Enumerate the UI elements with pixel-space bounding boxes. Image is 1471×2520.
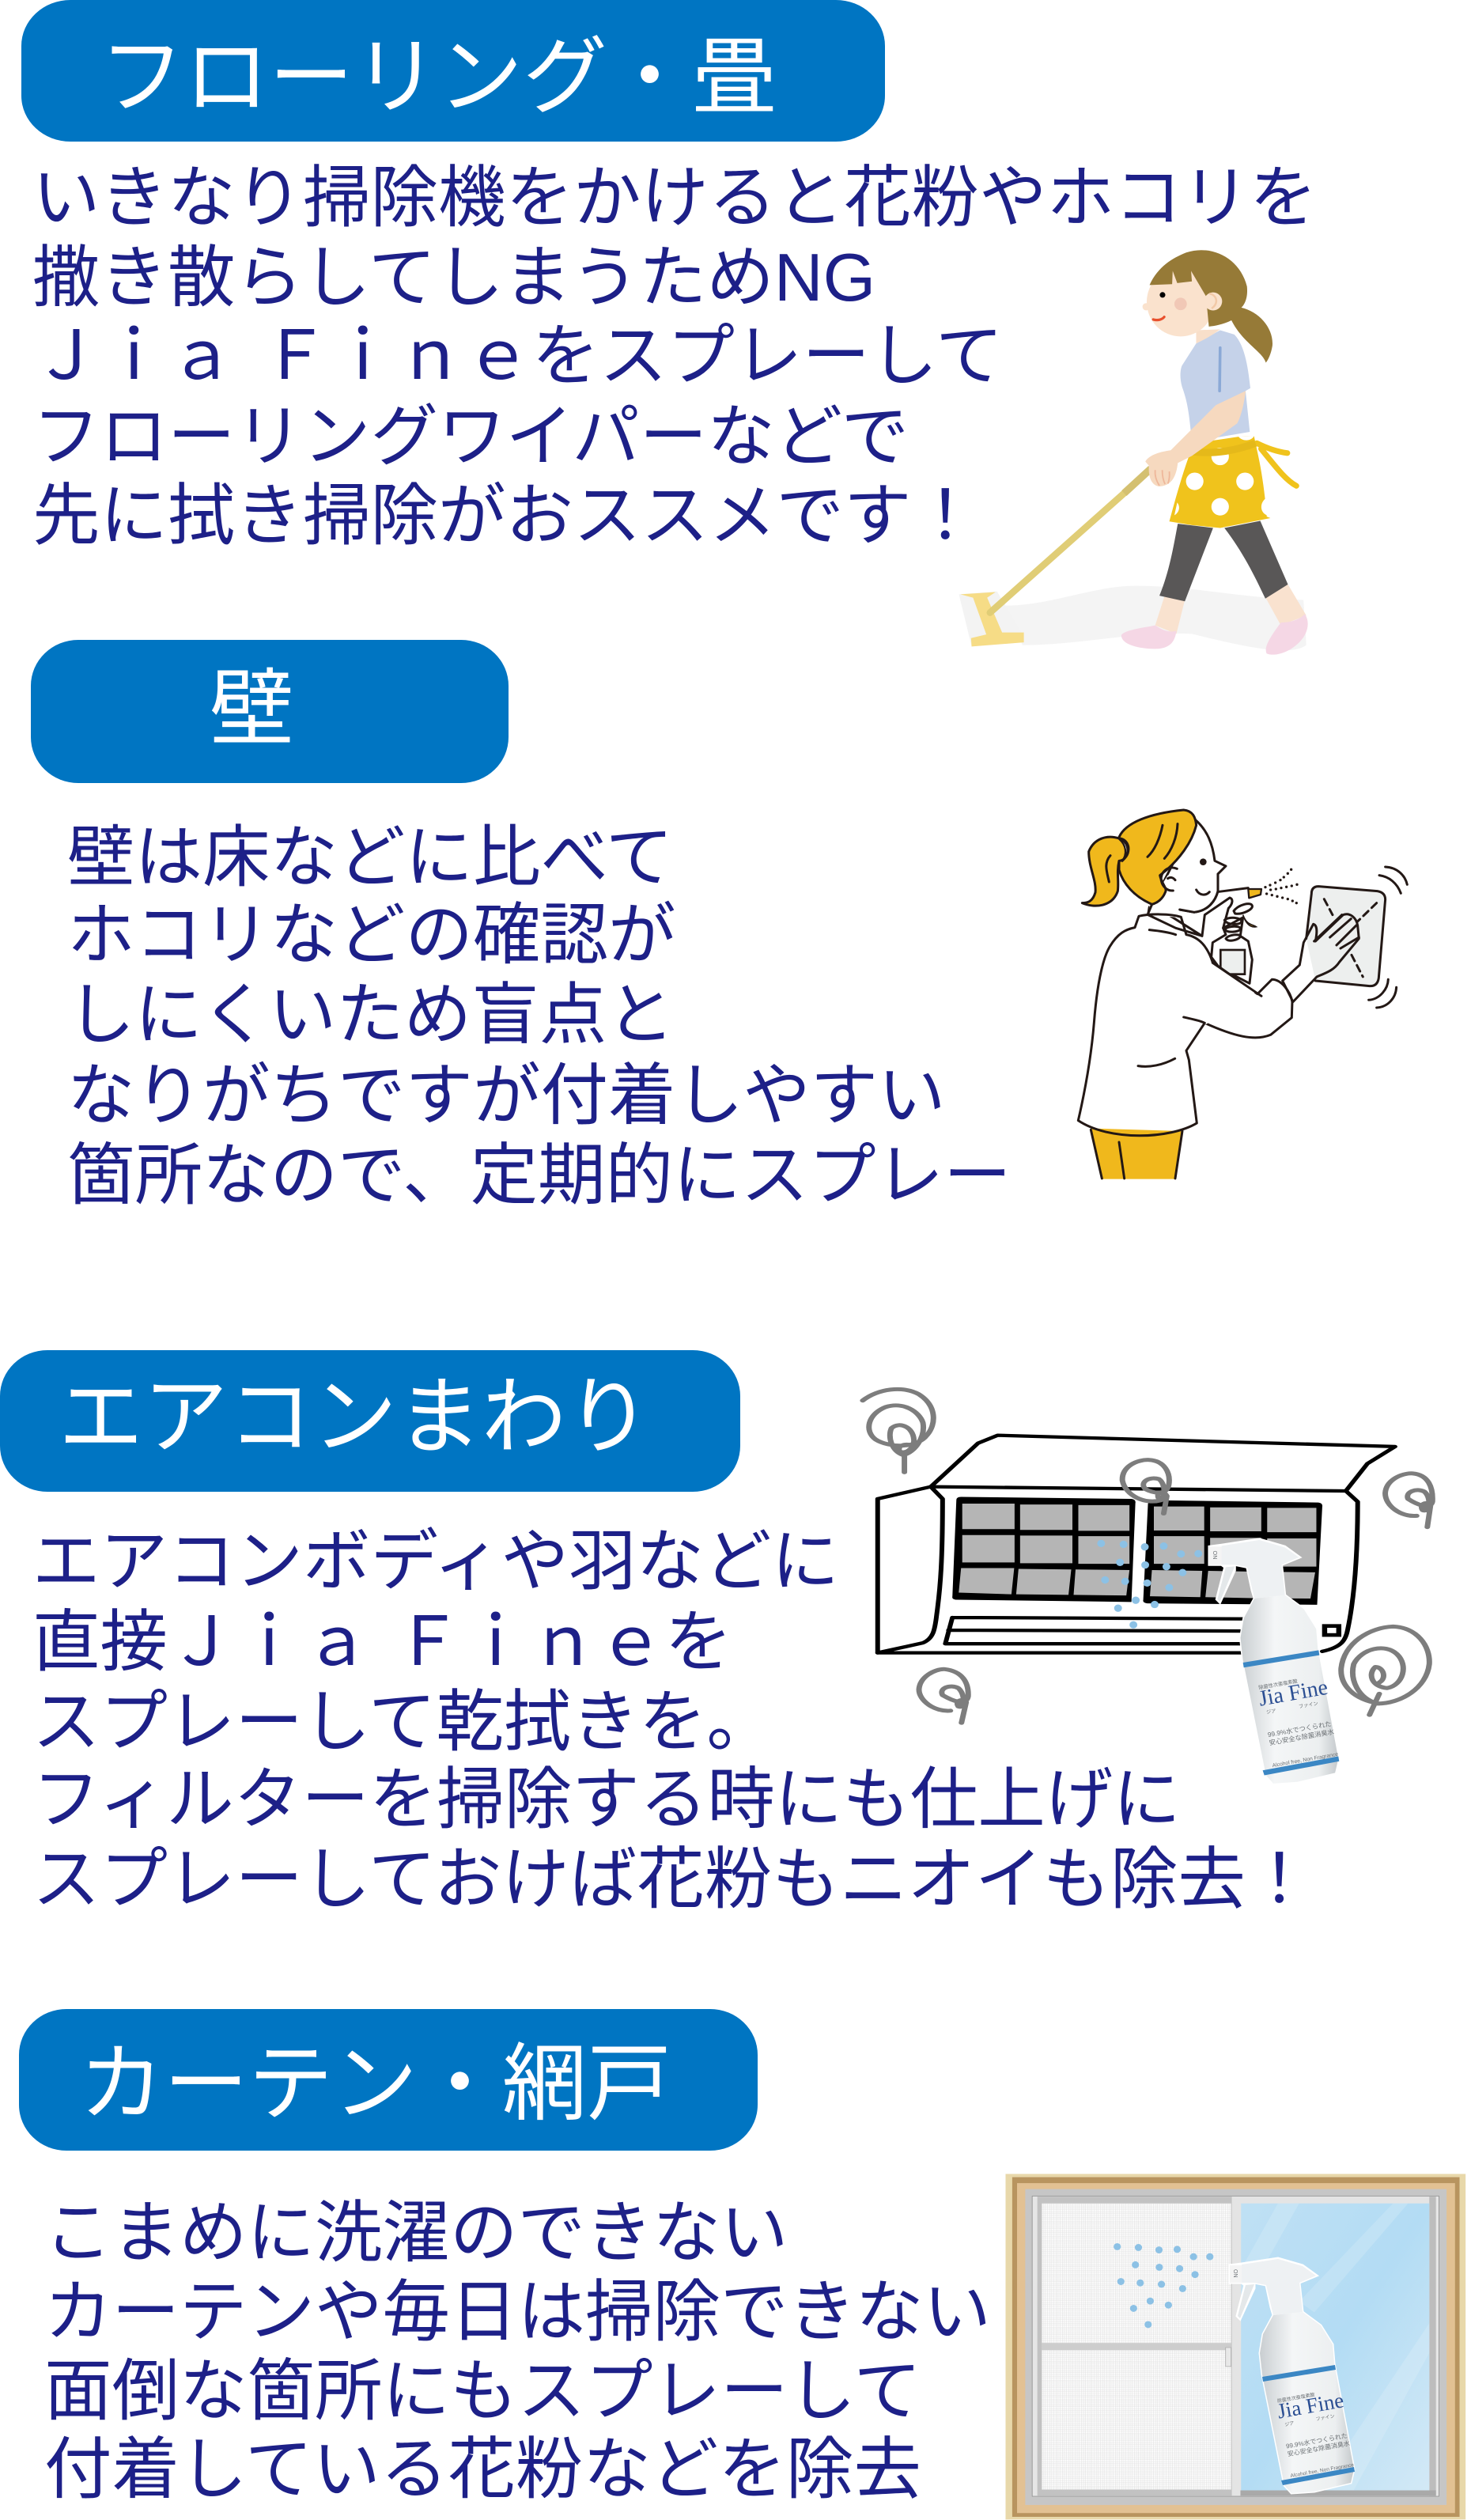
icon: Jia Fine spray bottle (window)	[1230, 2258, 1356, 2493]
text block: wall: 壁は床などに比べて	[67, 820, 673, 895]
illustration: air conditioner with pollen swirls	[863, 1389, 1432, 1723]
illustration: woman mopping the floor	[959, 250, 1308, 655]
text block: curtains and screens: 付着している花粉などを除去	[44, 2432, 921, 2507]
heading: カーテン・網戸	[19, 2009, 758, 2151]
icon: Jia Fine spray bottle (window): Jia Fine	[1276, 2388, 1345, 2424]
text block: flooring	[32, 161, 1318, 554]
icon: Jia Fine spray bottle (air conditioner)	[1209, 1539, 1340, 1784]
text block: curtains and screens	[44, 2196, 991, 2507]
illustration: woman spraying and wiping the wall	[1078, 810, 1407, 1179]
icon: Jia Fine spray bottle (window): 除菌性次亜塩素酸	[1276, 2391, 1315, 2405]
text block: air conditioner	[32, 1524, 1313, 1917]
text block: wall: なりがちですが付着しやすい	[67, 1058, 946, 1133]
text block: curtains and screens: カーテンや毎日は掃除できない	[44, 2275, 991, 2350]
icon: Jia Fine spray bottle (air conditioner): ジア	[1266, 1708, 1276, 1716]
text block: air conditioner: フィルターを掃除する時にも仕上げに	[32, 1762, 1181, 1837]
icon: Jia Fine spray bottle (air conditioner): 除菌性次亜塩素酸	[1258, 1678, 1299, 1691]
heading: エアコンまわり	[0, 1350, 740, 1492]
icon: Jia Fine spray bottle (window): ジア	[1284, 2420, 1295, 2427]
text block: wall: しにくいため盲点と	[67, 978, 675, 1053]
heading: エアコンまわり: エアコンまわり	[59, 1369, 651, 1464]
heading: フローリング・畳	[21, 0, 885, 142]
heading: 壁	[31, 640, 509, 783]
text block: curtains and screens: こまめに洗濯のできない	[44, 2196, 788, 2271]
icon: Jia Fine spray bottle (air conditioner): Jia Fine	[1257, 1675, 1329, 1712]
heading: 壁: 壁	[210, 661, 294, 756]
icon: pollen swirls	[863, 1389, 1432, 1723]
icon: Jia Fine spray bottle (window): ON	[1232, 2269, 1238, 2278]
text block: curtains and screens: 面倒な箇所にもスプレーして	[44, 2354, 921, 2429]
icon: Jia Fine spray bottle (air conditioner): 安心安全な除菌消臭水	[1269, 1727, 1335, 1746]
text block: air conditioner: スプレーしておけば花粉もニオイも除去！	[32, 1842, 1313, 1917]
icon: Jia Fine spray bottle (air conditioner): 99.9%水でつくられた	[1267, 1720, 1332, 1739]
icon: Jia Fine spray bottle (window): 99.9%水でつくられた	[1285, 2431, 1348, 2450]
text block: air conditioner: スプレーして乾拭きを。	[32, 1685, 774, 1760]
heading: カーテン・網戸: カーテン・網戸	[79, 2036, 671, 2131]
text block: flooring: 先に拭き掃除がおススメです！	[32, 479, 979, 554]
icon: Jia Fine spray bottle (air conditioner): ON	[1212, 1551, 1219, 1559]
icon: Jia Fine spray bottle (window): Alcohol free, Non Fragrance	[1290, 2462, 1355, 2479]
text block: air conditioner: エアコンボディや羽などに	[32, 1524, 839, 1599]
text block: wall: ホコリなどの確認が	[67, 898, 675, 973]
text block: flooring: いきなり掃除機をかけると花粉やホコリを	[32, 161, 1318, 236]
text block: wall: 箇所なので、定期的にスプレー	[67, 1138, 1012, 1213]
text block: flooring: フローリングワイパーなどで	[32, 399, 909, 475]
icon: Jia Fine spray bottle (air conditioner): ファイン	[1299, 1701, 1318, 1710]
heading: フローリング・畳: フローリング・畳	[100, 29, 777, 124]
icon: Jia Fine spray bottle (air conditioner): Alcohol free, Non Fragrance	[1272, 1752, 1339, 1769]
text block: wall	[67, 820, 1012, 1213]
icon: Jia Fine spray bottle (window): 安心安全な除菌消臭水	[1287, 2439, 1350, 2458]
text block: air conditioner: 直接Ｊｉａ Ｆｉｎｅを	[32, 1605, 732, 1680]
illustration: window with insect screen	[1005, 2174, 1465, 2519]
icon: Jia Fine spray bottle (window): ファイン	[1315, 2413, 1335, 2422]
text block: flooring: Ｊｉａ Ｆｉｎｅをスプレーして	[32, 319, 1003, 394]
text block: flooring: 撒き散らしてしまうためNG	[32, 240, 875, 316]
